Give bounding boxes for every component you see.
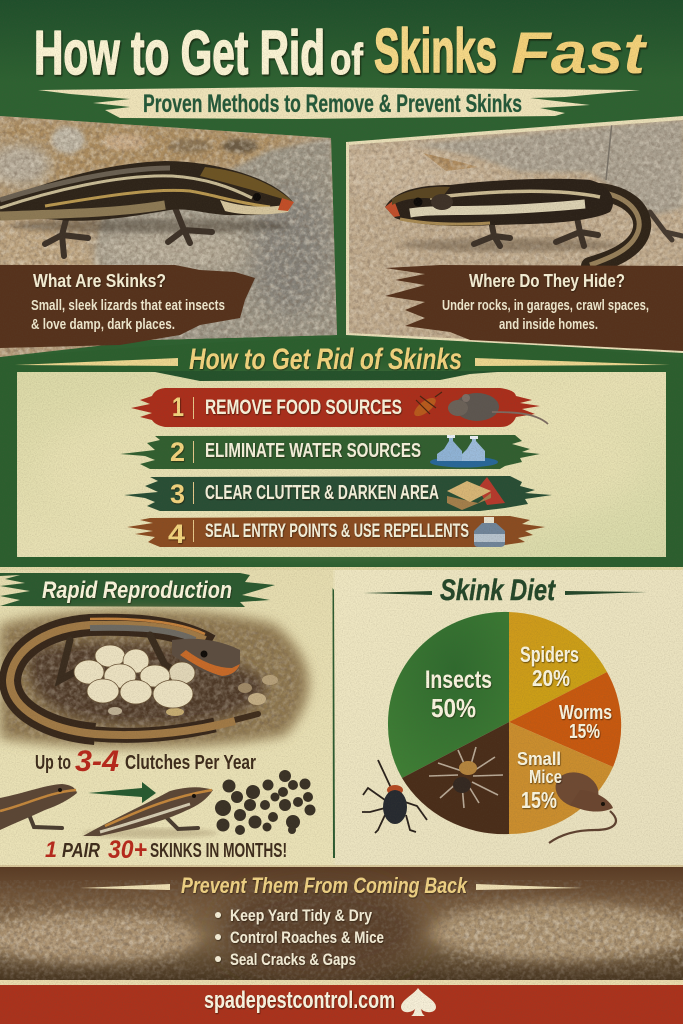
icon: spider xyxy=(429,747,503,808)
title: How to Get Rid xyxy=(34,19,325,88)
step 2 bar: 2 xyxy=(170,437,185,467)
pair text: 30+ xyxy=(108,836,147,864)
banner: Rapid Reproduction xyxy=(42,577,232,604)
caption: where do they hide: and inside homes. xyxy=(499,317,598,333)
arrow xyxy=(88,782,156,803)
panel: prevent them from coming back xyxy=(0,865,683,980)
step 1 bar: REMOVE FOOD SOURCES xyxy=(205,396,402,419)
step 1 bar xyxy=(131,388,548,427)
clutches text: Clutches Per Year xyxy=(125,752,256,774)
panel: skink diet xyxy=(332,570,683,867)
bullet list xyxy=(215,906,384,969)
pie labels: Worms xyxy=(559,702,612,724)
heading: Skink Diet xyxy=(440,574,557,607)
step 3 bar: CLEAR CLUTTER & DARKEN AREA xyxy=(205,482,439,504)
clutches text: Up to xyxy=(35,752,71,774)
icon: mouse xyxy=(549,767,616,843)
title: Fast xyxy=(511,21,648,86)
pie labels xyxy=(425,642,612,813)
pie labels: Spiders xyxy=(520,642,579,667)
title: of xyxy=(330,35,363,84)
caption: what are skinks xyxy=(0,265,255,348)
icon: water bottles xyxy=(430,435,498,468)
heading: Prevent Them From Coming Back xyxy=(181,873,468,898)
caption: what are skinks: Small, sleek lizards that eat insects xyxy=(31,298,225,314)
subtitle ribbon xyxy=(38,87,640,119)
subtitle ribbon: Proven Methods to Remove & Prevent Skinks xyxy=(143,90,522,118)
caption: what are skinks: What Are Skinks? xyxy=(33,271,166,291)
bullet list: Control Roaches & Mice xyxy=(230,928,384,947)
panel: rapid reproduction xyxy=(0,570,333,867)
slice: insects xyxy=(388,612,509,778)
icon: repellent jug xyxy=(474,517,505,547)
skink right xyxy=(385,179,683,266)
photo: skink on rock xyxy=(0,116,340,361)
pair text: 1 xyxy=(45,837,57,862)
pair text xyxy=(45,836,287,864)
icon: spade xyxy=(401,988,436,1016)
banner xyxy=(0,573,275,607)
eggs xyxy=(74,645,195,708)
pie labels: 15% xyxy=(569,721,600,743)
step 4 bar: 4 xyxy=(168,519,185,549)
slice: spiders xyxy=(509,612,607,722)
title: Skinks xyxy=(374,17,497,86)
step 3 bar xyxy=(124,476,552,511)
caption: where do they hide: Where Do They Hide? xyxy=(469,271,625,291)
caption: where do they hide xyxy=(385,265,683,351)
icon: mouse xyxy=(448,393,548,424)
checklist background xyxy=(17,372,666,557)
panel: how to get rid of skinks xyxy=(0,338,683,570)
heading brush xyxy=(150,371,510,381)
footer bar xyxy=(0,980,683,1024)
slice: brown xyxy=(402,722,509,834)
pie labels: 20% xyxy=(532,665,570,691)
slice: small mice xyxy=(509,722,613,834)
step 4 bar xyxy=(127,516,545,549)
caption: what are skinks: & love damp, dark places. xyxy=(31,317,175,333)
slice: worms xyxy=(509,672,621,767)
pie labels: 15% xyxy=(521,787,557,813)
heading xyxy=(363,574,647,607)
photo frame: where they hide xyxy=(346,116,683,353)
pie labels: Small xyxy=(517,749,561,769)
pair text: SKINKS IN MONTHS! xyxy=(150,840,287,862)
pair text: PAIR xyxy=(62,840,100,862)
small skink: two xyxy=(82,787,218,838)
bullet list: Keep Yard Tidy & Dry xyxy=(230,906,372,925)
cluster: many skinks xyxy=(215,770,316,835)
icon: beetle xyxy=(362,760,427,833)
photo: skink on sand xyxy=(349,120,683,352)
pie labels: 50% xyxy=(431,693,476,723)
step 1 bar: 1 xyxy=(172,392,184,422)
website: spadepestcontrol.com xyxy=(204,987,395,1014)
clutches text xyxy=(35,745,256,778)
step 2 bar: ELIMINATE WATER SOURCES xyxy=(205,440,421,462)
skink left xyxy=(0,161,294,256)
step 3 bar: 3 xyxy=(170,479,185,509)
pie labels: Insects xyxy=(425,666,492,694)
pie labels: Mice xyxy=(529,767,562,787)
heading: How to Get Rid of Skinks xyxy=(189,343,462,376)
icon: bricks and wedge xyxy=(447,477,505,510)
pie chart xyxy=(388,612,621,834)
step 4 bar: SEAL ENTRY POINTS & USE REPELLENTS xyxy=(205,521,469,542)
illustration: skink guarding eggs xyxy=(0,605,325,755)
icon: cockroach xyxy=(411,392,442,419)
bullet list: Seal Cracks & Gaps xyxy=(230,950,356,969)
clutches text: 3-4 xyxy=(75,745,119,778)
step 2 bar xyxy=(120,435,540,469)
small skink: one xyxy=(0,784,77,830)
